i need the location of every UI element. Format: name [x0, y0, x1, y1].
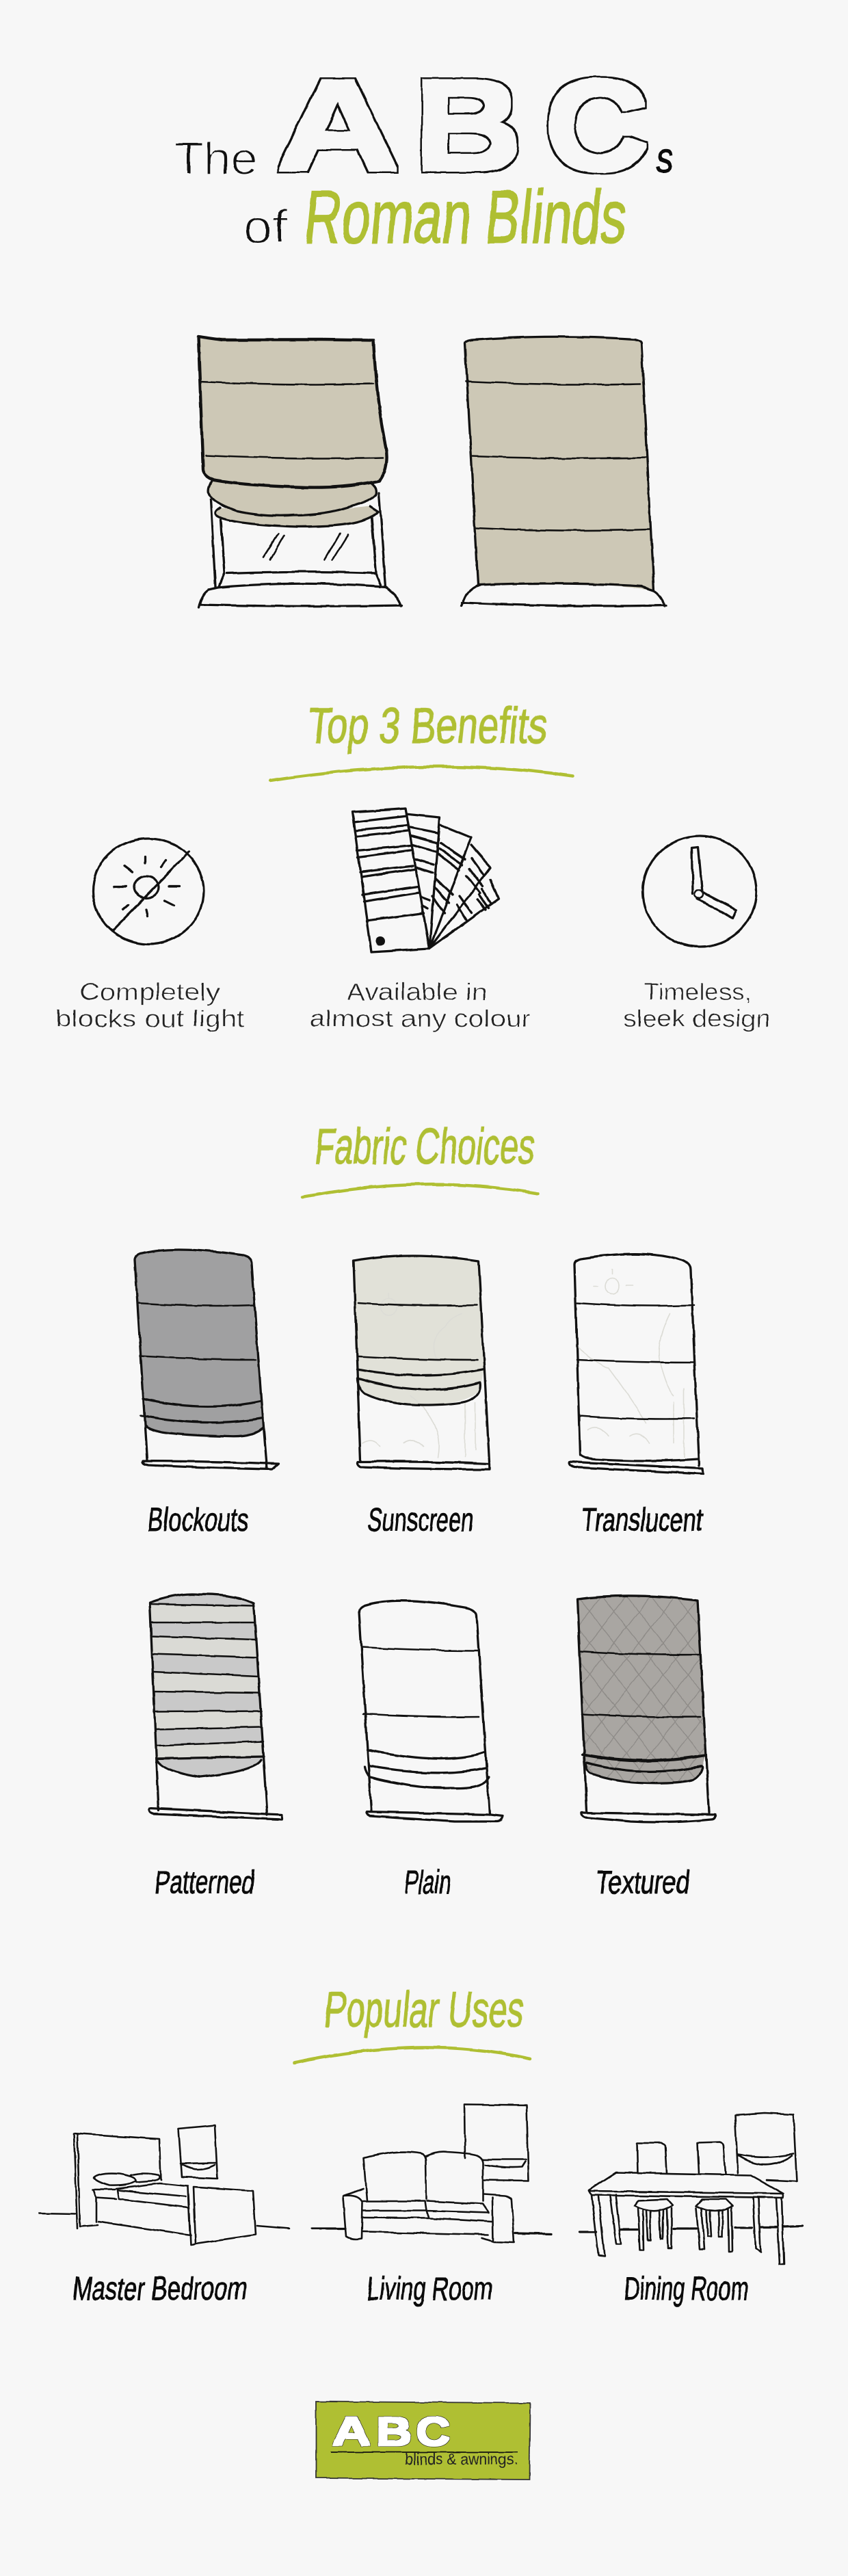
illustration: living room — [312, 2105, 551, 2242]
illustration: bedroom — [39, 2125, 289, 2245]
icon: sun blocked — [93, 839, 204, 944]
hero illustration: partly raised blind — [198, 337, 402, 607]
title words: Roman Blinds: Roman Blinds — [300, 175, 631, 259]
label: Plain: Plain — [403, 1864, 453, 1901]
illustration: dining room — [579, 2113, 802, 2264]
logo letters: ABC — [332, 2410, 450, 2454]
icon: colour swatch fan — [352, 809, 499, 952]
logo tagline: blinds & awnings. — [405, 2450, 518, 2468]
title — [174, 53, 676, 259]
benefit text: any colour: Available in — [347, 979, 487, 1006]
heading underline — [294, 2047, 530, 2063]
title letter: s: s — [654, 135, 676, 182]
section: fabric choices — [135, 1118, 715, 1901]
section: top 3 benefits — [55, 697, 771, 1032]
title letters: ABC outlined: B — [414, 53, 521, 197]
heading underline — [270, 767, 573, 780]
benefit text: timeless design: sleek design — [623, 1006, 771, 1032]
title letters: ABC outlined: A — [276, 53, 399, 197]
benefit text: timeless design: Timeless, — [644, 979, 752, 1006]
label: Living Room: Living Room — [365, 2270, 495, 2307]
benefit text: any colour — [310, 979, 531, 1032]
logo letters: ABC: A — [332, 2410, 371, 2454]
title letters: ABC outlined: C — [545, 53, 648, 197]
hero illustration: fully lowered blind — [462, 337, 666, 606]
label: Sunscreen: Sunscreen — [366, 1501, 476, 1538]
blind: sunscreen — [354, 1256, 490, 1469]
section: popular uses — [39, 1981, 802, 2307]
blind: blockouts — [135, 1249, 278, 1469]
title word: The: The — [174, 133, 258, 185]
title word: of: of — [243, 200, 288, 253]
benefit text: blocks out light: Completely — [79, 979, 221, 1006]
title letters: ABC outlined — [276, 53, 648, 197]
logo letters: ABC: B — [376, 2410, 412, 2454]
blind: patterned — [150, 1594, 282, 1819]
label: Blockouts: Blockouts — [146, 1501, 251, 1538]
label: Patterned: Patterned — [153, 1864, 257, 1901]
blind: plain — [359, 1601, 503, 1822]
label: Translucent: Translucent — [580, 1501, 705, 1538]
logo: ABC blinds and awnings — [316, 2402, 530, 2480]
heading: Top 3 Benefits: Top 3 Benefits — [305, 697, 551, 754]
label: Textured: Textured — [594, 1864, 692, 1901]
heading underline — [303, 1185, 538, 1197]
heading: Fabric Choices: Fabric Choices — [312, 1118, 538, 1174]
benefit text: blocks out light: blocks out light — [55, 1006, 245, 1032]
benefit text: blocks out light — [55, 979, 245, 1032]
logo letters: ABC: C — [416, 2410, 450, 2454]
label: Dining Room: Dining Room — [622, 2270, 751, 2307]
icon: clock — [643, 836, 756, 947]
blind: translucent — [570, 1254, 703, 1474]
benefit text: any colour: almost any colour — [310, 1006, 531, 1032]
heading: Popular Uses: Popular Uses — [321, 1981, 527, 2038]
benefit text: timeless design — [623, 979, 771, 1032]
blind: textured — [577, 1596, 715, 1822]
label: Master Bedroom: Master Bedroom — [71, 2270, 250, 2307]
